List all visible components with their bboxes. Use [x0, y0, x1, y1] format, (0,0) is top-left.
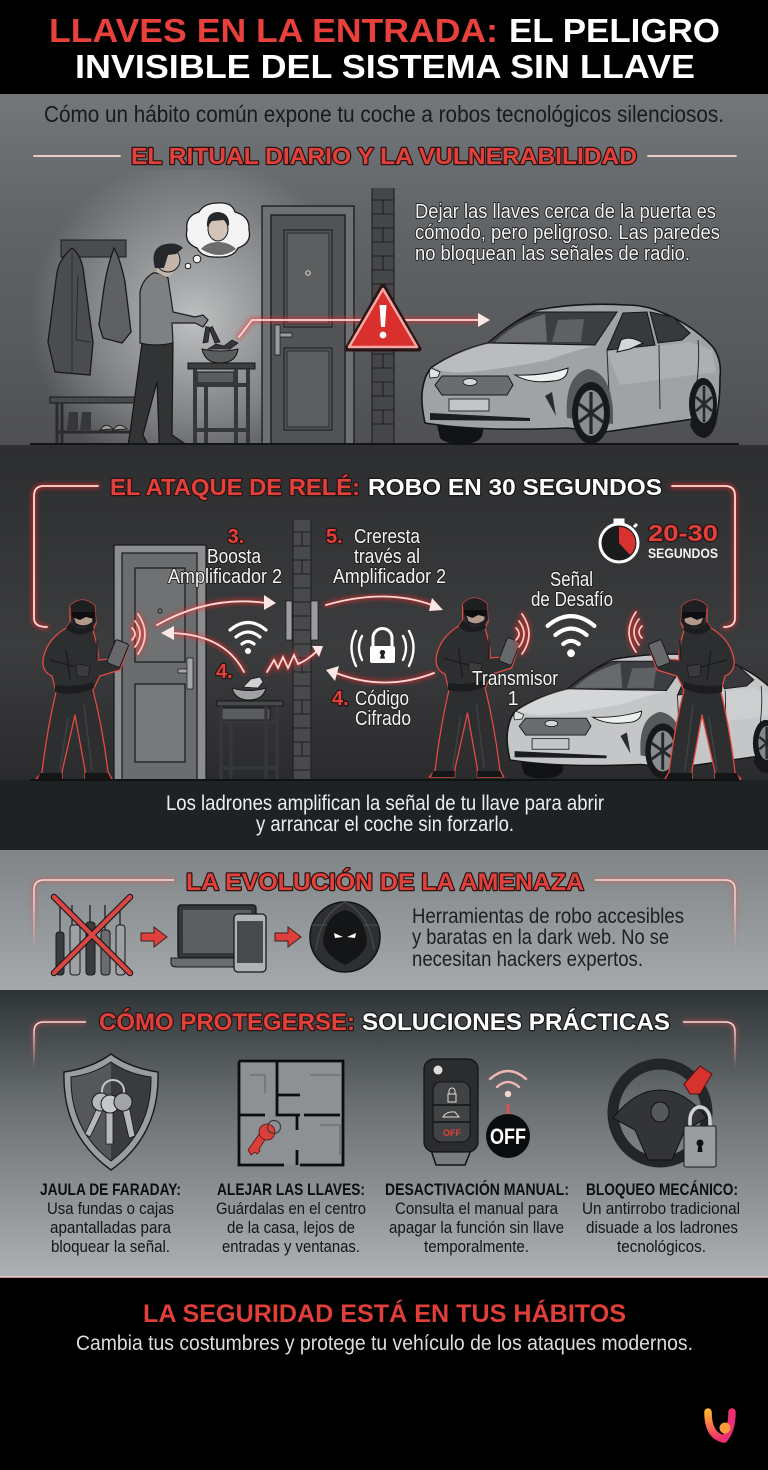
- text: step 4 encrypted code: Cifrado: [355, 708, 411, 730]
- text: footer message: Cambia tus costumbres y protege tu vehículo de los ataques modernos.: [76, 1332, 693, 1355]
- icon: signal waves thief 3: [629, 612, 642, 652]
- icon: thought bubble: [185, 203, 250, 269]
- icon: brick wall: [372, 188, 394, 445]
- figure: thief at car: [648, 600, 741, 779]
- icon: challenge wifi: [548, 616, 594, 657]
- text column: move keys away: ALEJAR LAS LLAVES:: [217, 1180, 365, 1199]
- frame: corner brackets: [34, 1022, 735, 1068]
- text column: manual deactivation: temporalmente.: [424, 1237, 529, 1256]
- icon: floor plan with key: [239, 1061, 343, 1165]
- icon: hooded hacker globe: [310, 902, 380, 972]
- text: step 5: través al: [354, 546, 420, 568]
- text block: relay explanation: y arrancar el coche sin forzarlo.: [256, 813, 514, 836]
- text column: faraday cage: JAULA DE FARADAY:: [40, 1180, 181, 1199]
- icon: key fob and off signal: [424, 1059, 530, 1165]
- text: challenge signal: [531, 569, 613, 611]
- text column: faraday cage: apantalladas para: [50, 1218, 171, 1237]
- text block: threat description: y baratas en la dark web. No se: [412, 926, 669, 949]
- icon: wall with relay device: [286, 520, 318, 780]
- text: step 3: 3.: [228, 526, 244, 548]
- frame: red corner brackets: [34, 486, 735, 627]
- panel: relay attack: [0, 445, 768, 850]
- text column: faraday cage: Usa fundas o cajas: [47, 1199, 174, 1218]
- icon: steering wheel with lock: [613, 1064, 716, 1167]
- icon: side table with bowl: [188, 340, 255, 443]
- heading: title line 2: INVISIBLE DEL SISTEMA SIN LLAVE: [75, 48, 695, 85]
- icon: stopwatch: [600, 520, 638, 562]
- panel: title header: [0, 0, 768, 94]
- icon: car: [422, 304, 720, 444]
- icon: key fob and off signal: OFF: [443, 1128, 461, 1138]
- text column: faraday cage: bloquear la señal.: [51, 1237, 170, 1256]
- text column: mechanical lock: tecnológicos.: [617, 1237, 706, 1256]
- text: step 3: Boosta: [207, 546, 262, 568]
- arrow: encrypted code return: [326, 666, 434, 682]
- text: step 4 encrypted code: Código: [355, 688, 409, 710]
- text block: ritual description: cómodo, pero peligroso. Las paredes: [415, 222, 720, 244]
- text: step 4 near key: 4.: [216, 661, 233, 683]
- arrow: key to thief: [161, 626, 244, 672]
- figure: thief with transmitter: [429, 598, 520, 777]
- text: step 5: Creresta: [354, 526, 421, 548]
- text column: mechanical lock: [582, 1180, 740, 1256]
- text: step 3: [168, 526, 282, 588]
- text column: move keys away: [216, 1180, 366, 1256]
- text: step 5: Amplificador 2: [333, 566, 446, 588]
- text column: manual deactivation: [385, 1180, 569, 1256]
- text column: mechanical lock: Un antirrobo tradicional: [582, 1199, 740, 1218]
- panel: daily ritual and vulnerability: [0, 94, 768, 446]
- panel: footer: [0, 1277, 768, 1470]
- icon: coat rack with coats: [48, 240, 131, 375]
- icon: man leaving keys: [128, 244, 220, 445]
- heading: how to protect: SOLUCIONES PRÁCTICAS: [362, 1008, 670, 1036]
- text column: move keys away: de la casa, lejos de: [227, 1218, 355, 1237]
- arrow: tools to devices: [141, 927, 167, 947]
- arrow: devices to hacker: [275, 927, 301, 947]
- text block: relay explanation: [166, 792, 604, 836]
- icon: signal waves thief 2: [516, 614, 529, 654]
- arrow: zigzag key signal: [267, 646, 323, 672]
- text block: ritual description: Dejar las llaves cerca de la puerta es: [415, 201, 716, 223]
- text: challenge signal: Señal: [550, 569, 593, 591]
- text block: threat description: necesitan hackers expertos.: [412, 948, 643, 971]
- heading: relay attack: ROBO EN 30 SEGUNDOS: [368, 474, 662, 500]
- text column: mechanical lock: disuade a los ladrones: [586, 1218, 738, 1237]
- heading: how to protect: CÓMO PROTEGERSE:: [99, 1008, 355, 1036]
- text block: threat description: Herramientas de robo accesibles: [412, 905, 684, 928]
- heading: threat evolution: LA EVOLUCIÓN DE LA AMENAZA: [186, 868, 584, 896]
- arrow: thief to relay: [157, 595, 276, 625]
- icon: key fob and off signal: OFF: [490, 1124, 526, 1149]
- text: 20-30 seconds: SEGUNDOS: [648, 545, 718, 561]
- text: step 5: 5.: [326, 526, 343, 548]
- icon: padlock with waves: [352, 628, 414, 666]
- icon: warning triangle: [347, 286, 419, 349]
- text: transmitter: Transmisor: [472, 668, 558, 690]
- text column: move keys away: Guárdalas en el centro: [216, 1199, 366, 1218]
- heading: how to protect: [99, 1008, 670, 1036]
- icon: wifi near table: [230, 622, 266, 654]
- text block: threat description: [412, 905, 684, 971]
- panel: threat evolution: [0, 850, 768, 990]
- heading: footer: LA SEGURIDAD ESTÁ EN TUS HÁBITOS: [143, 1299, 626, 1328]
- panel: how to protect yourself: [0, 990, 768, 1277]
- icon: side table with keys: [217, 677, 283, 780]
- text block: relay explanation: Los ladrones amplifican la señal de tu llave para abrir: [166, 792, 604, 815]
- text: challenge signal: de Desafío: [531, 589, 613, 611]
- text column: faraday cage: [40, 1180, 181, 1256]
- heading: relay attack: [110, 473, 662, 500]
- text: step 4 encrypted code: [332, 688, 411, 730]
- text block: ritual description: [415, 201, 720, 265]
- icon: door: [114, 545, 206, 780]
- icon: door: [262, 206, 354, 445]
- frame: corner brackets: [34, 880, 735, 950]
- text: 20-30 seconds: 20-30: [648, 520, 718, 546]
- text block: ritual description: no bloquean las señales de radio.: [415, 243, 690, 265]
- icon: crossed lockpicks: [54, 897, 130, 975]
- heading: title line 1: [49, 12, 720, 49]
- icon: laptop and phone: [171, 905, 266, 972]
- text column: manual deactivation: DESACTIVACIÓN MANUAL:: [385, 1180, 569, 1199]
- icon: faraday shield with keys: [64, 1054, 158, 1170]
- figure: thief at door: [36, 600, 129, 779]
- arrow: relay to transmitter: [326, 596, 443, 611]
- arrow: signal through the wall: [239, 313, 490, 337]
- text column: manual deactivation: apagar la función sin llave: [389, 1218, 564, 1237]
- icon: shoe bench: [50, 397, 138, 443]
- text: transmitter: [472, 668, 558, 710]
- text: step 3: Amplificador 2: [168, 566, 282, 588]
- heading: title line 1: LLAVES EN LA ENTRADA:: [49, 12, 498, 49]
- text: 20-30 seconds: [648, 520, 718, 561]
- heading: relay attack: EL ATAQUE DE RELÉ:: [110, 473, 360, 500]
- text: step 4 encrypted code: 4.: [332, 688, 349, 710]
- icon: car: [507, 654, 768, 779]
- heading: daily ritual: EL RITUAL DIARIO Y LA VULNERABILIDAD: [131, 143, 637, 169]
- text: transmitter: 1: [507, 688, 519, 710]
- text column: move keys away: entradas y ventanas.: [222, 1237, 360, 1256]
- icon: logo: [708, 1412, 732, 1439]
- heading: title line 1: EL PELIGRO: [509, 12, 720, 49]
- text column: manual deactivation: Consulta el manual para: [395, 1199, 558, 1218]
- text: step 5: [326, 526, 446, 588]
- icon: signal waves thief 1: [132, 614, 145, 654]
